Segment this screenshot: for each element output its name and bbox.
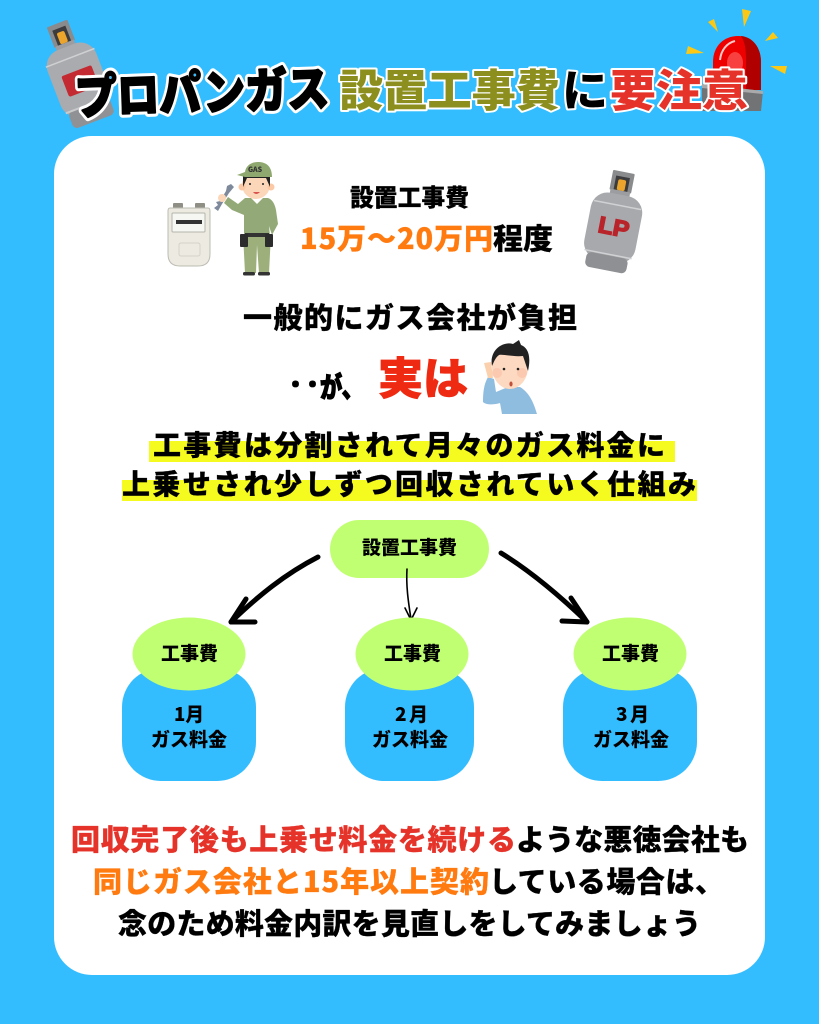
text: 設置工事費: 設置工事費 — [350, 178, 469, 213]
arrow: to month 3 — [501, 553, 587, 622]
icon: gas worker — [214, 162, 278, 276]
text: が、 — [287, 358, 364, 407]
diagram: month 1: ガス料金 — [151, 725, 227, 752]
title part: 設置工事費: 設置工事費 — [339, 55, 560, 119]
title part: 要注意: 要注意 — [610, 55, 748, 119]
title part: プロパンガス: プロパンガス — [74, 50, 330, 128]
icon: LP gas cylinder — [579, 167, 650, 275]
text: closing line 1: ような悪徳会社も — [516, 817, 749, 859]
title part: プロパンガス: プロパンガス — [74, 50, 330, 128]
highlight line 1: 工事費は分割されて月々のガス料金に — [153, 424, 665, 464]
icon: header gas cylinder — [33, 14, 119, 131]
text: 一般的にガス会社が負担: 一般的にガス会社が負担 — [243, 295, 577, 337]
diagram: month 1: 工事費 — [161, 639, 218, 666]
diagram: month 3 — [563, 618, 697, 781]
text: closing line 2: 同じガス会社と15年以上契約 — [93, 859, 489, 901]
text: cost range: 程度 — [493, 216, 553, 258]
icon: listening man — [483, 340, 537, 414]
arrow: to month 2 — [405, 569, 417, 620]
text: 実は: 実は — [378, 343, 468, 407]
icon: gas worker: GAS — [248, 165, 263, 175]
diagram: month 1 — [122, 618, 256, 781]
title part: に: に — [562, 55, 608, 119]
title part: 要注意: 要注意 — [610, 55, 748, 119]
diagram: top pill — [330, 520, 489, 578]
panel: main white card — [54, 136, 765, 975]
text: closing line 2 — [93, 859, 724, 901]
text: が、: ‥ — [287, 358, 321, 407]
title — [74, 50, 748, 128]
diagram: top pill: 設置工事費 — [362, 533, 457, 560]
text: closing line 1: 回収完了後も上乗せ料金を続ける — [71, 817, 516, 859]
title part: に: に — [562, 55, 608, 119]
text: closing line 1 — [71, 817, 749, 859]
diagram: month 2: 工事費 — [384, 639, 441, 666]
icon: red alarm light — [686, 9, 787, 111]
highlight line 2: 上乗せされ少しずつ回収されていく仕組み — [122, 463, 696, 503]
diagram: month 2 — [345, 618, 474, 781]
diagram: month 2: ガス料金 — [372, 725, 448, 752]
title part: 設置工事費: 設置工事費 — [339, 55, 560, 119]
icon: gas meter — [168, 203, 210, 266]
text: が、: が、 — [320, 366, 364, 406]
diagram: month 3: ガス料金 — [593, 725, 669, 752]
text: cost range: 15万～20万円 — [300, 216, 493, 258]
diagram: month 1: 1月 — [174, 700, 204, 727]
diagram: month 2: 2月 — [395, 700, 428, 727]
diagram: month 3: 3月 — [616, 700, 649, 727]
arrow: to month 1 — [231, 557, 318, 622]
diagram: month 3: 工事費 — [602, 639, 659, 666]
text: closing line 3: 念のため料金内訳を見直しをしてみましょう — [118, 901, 701, 943]
icon: LP gas cylinder: LP — [596, 211, 632, 243]
text: closing line 2: している場合は、 — [489, 859, 724, 901]
